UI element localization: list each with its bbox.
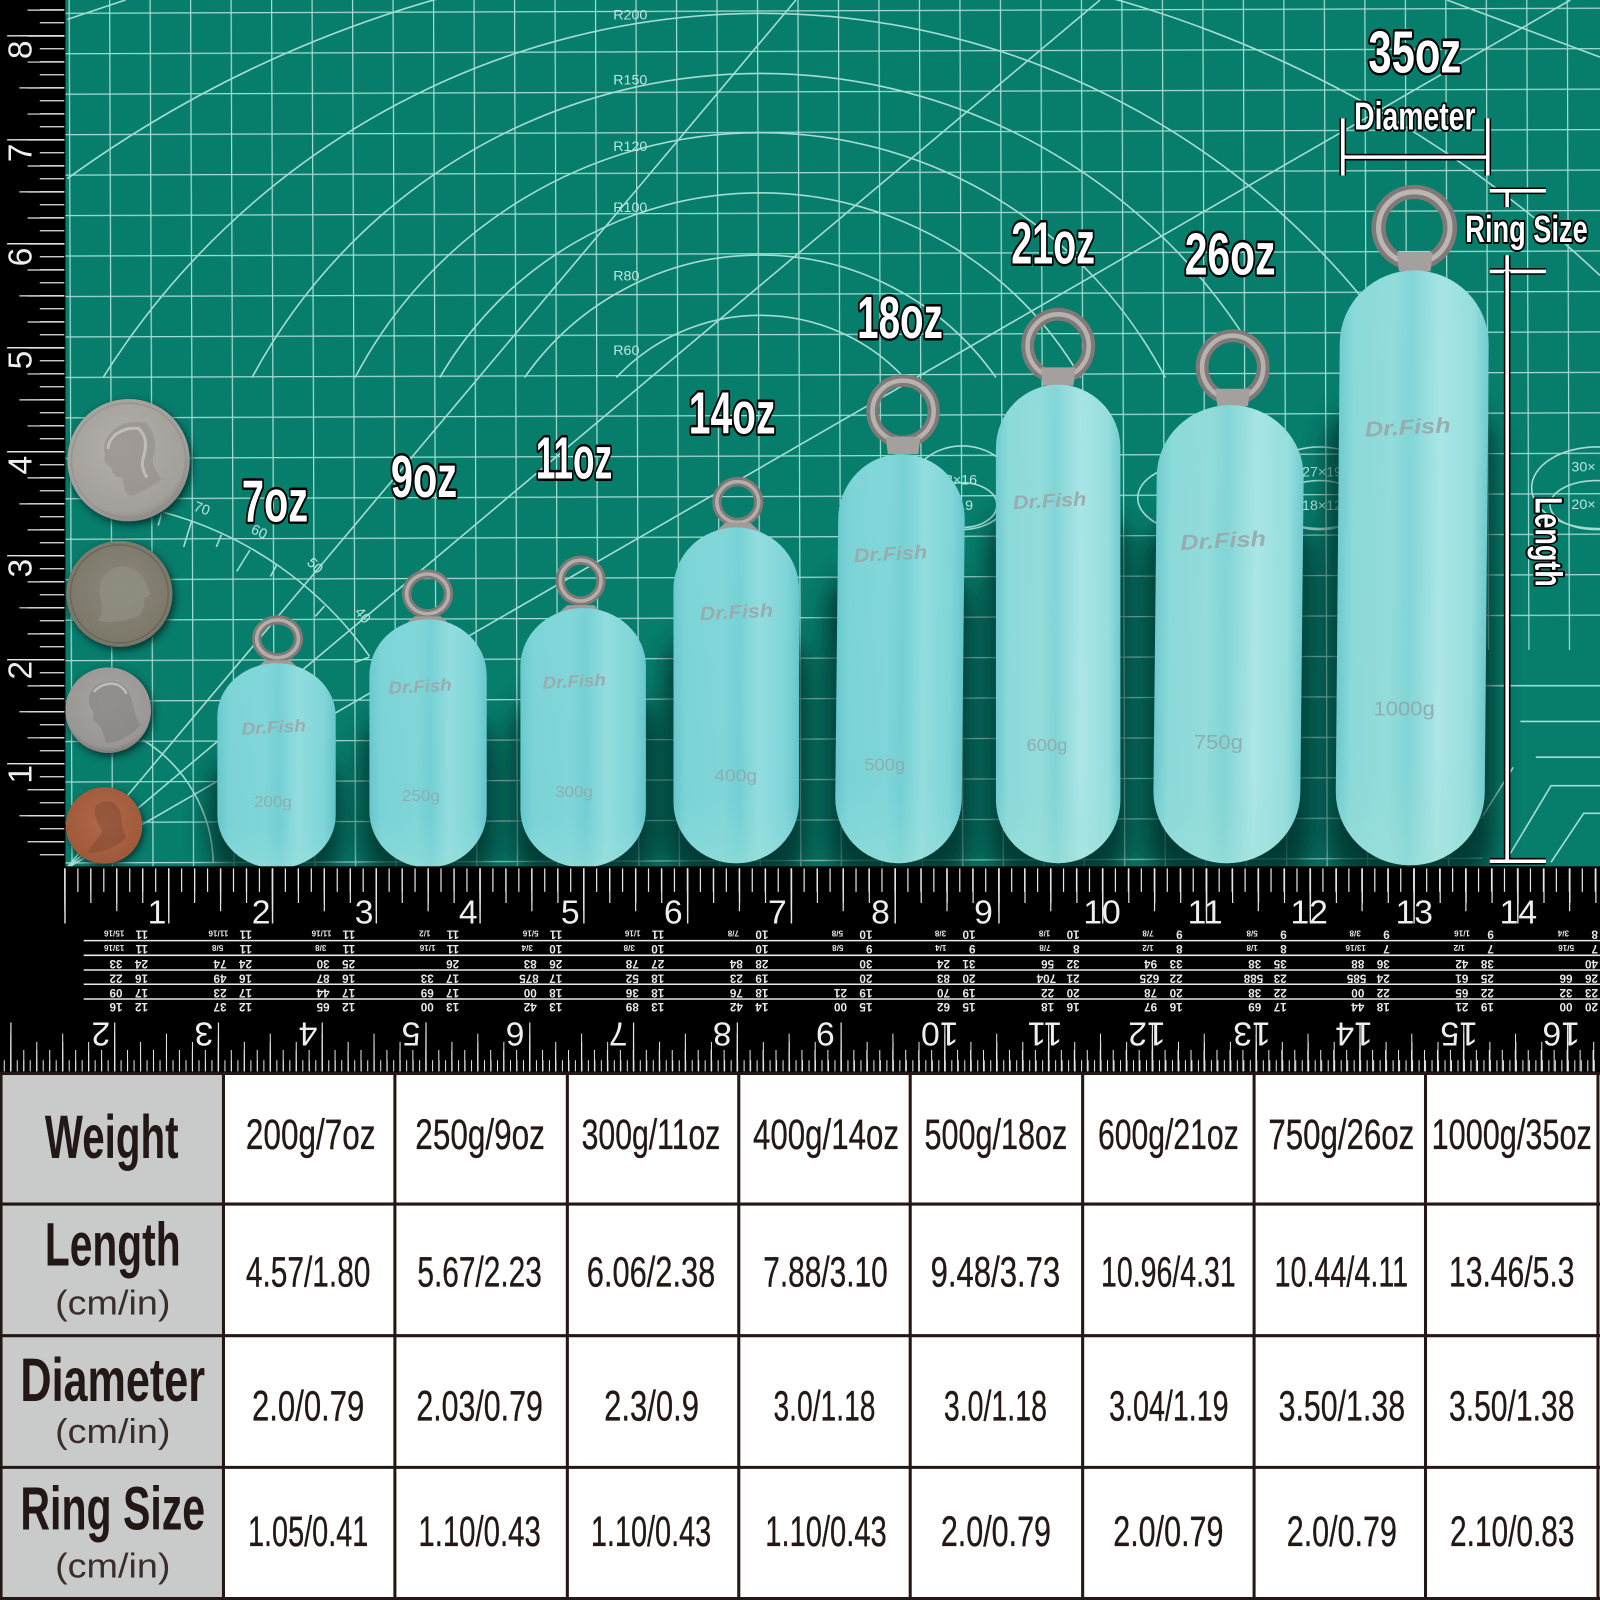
panel: cutting mat background: R100 bbox=[613, 200, 647, 216]
panel: cutting mat background bbox=[65, 0, 1600, 868]
conversion strip: 1113/16 bbox=[103, 942, 148, 955]
sinker: 18oz: Dr.Fish bbox=[853, 541, 928, 567]
left inch ruler: 8 bbox=[3, 40, 40, 59]
row: diameter: 3.04/1.19 bbox=[1109, 1382, 1229, 1430]
sinker: 7oz: Dr.Fish bbox=[241, 715, 306, 739]
row: weight: 400g/14oz bbox=[753, 1111, 899, 1159]
row: weight: Weight bbox=[45, 1103, 179, 1171]
conversion strip: 101/8 bbox=[1038, 928, 1080, 941]
bottom inverted ruler: 9 bbox=[816, 1014, 835, 1051]
conversion strip: 113/8 bbox=[315, 942, 355, 955]
conversion strip: 33 94 bbox=[1144, 957, 1183, 970]
conversion strip: 103/8 bbox=[934, 928, 976, 941]
bottom inverted ruler: 11 bbox=[1027, 1014, 1062, 1051]
conversion strip: 23 32 bbox=[1559, 986, 1598, 999]
row: ring size: 1.10/0.43 bbox=[418, 1508, 541, 1556]
conversion strip bbox=[84, 928, 1600, 1013]
sinker: 9oz: Dr.Fish bbox=[388, 675, 452, 698]
bottom inverted ruler: 16 bbox=[1543, 1014, 1580, 1051]
conversion strip: 16 49 bbox=[213, 971, 252, 984]
conversion strip: 93/8 bbox=[1349, 928, 1390, 941]
conversion strip: 10 bbox=[755, 942, 768, 955]
row: ring size bbox=[20, 1475, 1574, 1586]
coin: nickel bbox=[65, 667, 153, 756]
conversion strip: 18 36 bbox=[625, 986, 664, 999]
row: ring size: 1.05/0.41 bbox=[248, 1508, 368, 1556]
left inch ruler: 6 bbox=[3, 248, 40, 266]
conversion strip: 115/16 bbox=[522, 928, 562, 941]
conversion strip: 22 625 bbox=[1139, 971, 1183, 984]
sinker: 35oz: 1000g bbox=[1373, 698, 1435, 720]
conversion strip: 18 44 bbox=[1351, 1000, 1390, 1013]
row: diameter: 2.3/0.9 bbox=[604, 1382, 699, 1430]
conversion strip: 38 42 bbox=[1455, 957, 1494, 970]
conversion strip: 24 74 bbox=[213, 957, 252, 970]
bottom inverted ruler: 10 bbox=[921, 1014, 959, 1051]
sinker: 26oz: 750g bbox=[1194, 732, 1243, 754]
conversion strip: 18 52 bbox=[625, 971, 664, 984]
top inch ruler: 14 bbox=[1500, 894, 1537, 931]
left inch ruler: 5 bbox=[3, 351, 40, 369]
conversion strip: 35 38 bbox=[1248, 957, 1287, 970]
row: length: 6.06/2.38 bbox=[587, 1249, 715, 1297]
conversion strip: 15 62 bbox=[937, 1000, 976, 1013]
conversion strip: 20 22 bbox=[1041, 986, 1080, 999]
conversion strip: 26 83 bbox=[523, 957, 562, 970]
row: diameter: 2.0/0.79 bbox=[252, 1382, 364, 1430]
conversion strip: 91/4 bbox=[935, 942, 976, 955]
panel: cutting mat background: 27×19 bbox=[1302, 465, 1342, 481]
conversion strip: 107/8 bbox=[727, 928, 768, 941]
conversion strip: 95/8 bbox=[1246, 928, 1287, 941]
panel: cutting mat background: 2×16 bbox=[945, 473, 977, 489]
top inch ruler: 1 bbox=[148, 894, 166, 931]
conversion strip: 25 30 bbox=[316, 957, 355, 970]
sinker: 35oz bbox=[1335, 192, 1489, 866]
conversion strip: 20 bbox=[859, 971, 872, 984]
row: weight: 250g/9oz bbox=[415, 1111, 545, 1159]
conversion strip: 111/16 bbox=[624, 928, 664, 941]
conversion strip: 18 00 bbox=[523, 986, 562, 999]
row: diameter bbox=[20, 1346, 1574, 1451]
row: weight bbox=[45, 1103, 1592, 1171]
coins: size comparison bbox=[65, 399, 192, 866]
label: 9oz: 9oz bbox=[391, 443, 457, 510]
conversion strip: 713/16 bbox=[1345, 942, 1390, 955]
conversion strip: 103/4 bbox=[521, 942, 562, 955]
label: 21oz: 21oz bbox=[1011, 209, 1095, 276]
dimension: length bbox=[1490, 271, 1570, 861]
panel: cutting mat background: 70 bbox=[191, 499, 212, 519]
sinker: 14oz: Dr.Fish bbox=[699, 600, 774, 625]
row: length: 10.44/4.11 bbox=[1274, 1249, 1408, 1297]
row: length: Length bbox=[45, 1210, 181, 1278]
row: weight: 300g/11oz bbox=[582, 1111, 720, 1159]
panel: cutting mat background: 60 bbox=[248, 522, 270, 543]
conversion strip: 17 09 bbox=[109, 986, 148, 999]
top inch ruler bbox=[0, 866, 1600, 1074]
conversion strip: 20 78 bbox=[1144, 986, 1183, 999]
conversion strip: 36 88 bbox=[1351, 957, 1390, 970]
conversion strip: 103/8 bbox=[623, 942, 664, 955]
row: length: (cm/in) bbox=[55, 1284, 170, 1322]
row: length: 9.48/3.73 bbox=[931, 1249, 1060, 1297]
conversion strip: 15 00 bbox=[833, 1000, 872, 1013]
dimension: diameter: Diameter bbox=[1354, 96, 1476, 139]
conversion strip: 20 83 bbox=[937, 971, 976, 984]
conversion strip: 1115/16 bbox=[103, 928, 148, 941]
coin: penny bbox=[66, 787, 144, 866]
row: length: 10.96/4.31 bbox=[1101, 1249, 1236, 1297]
label: 26oz: 26oz bbox=[1185, 220, 1276, 287]
panel: cutting mat background: R150 bbox=[613, 73, 647, 89]
row: weight: 750g/26oz bbox=[1268, 1111, 1414, 1159]
conversion strip: 26 bbox=[446, 957, 459, 970]
conversion strip: 95/8 bbox=[832, 942, 872, 955]
conversion strip: 20 00 bbox=[1559, 1000, 1598, 1013]
weight labels bbox=[242, 18, 1461, 534]
conversion strip: 16 87 bbox=[317, 971, 355, 984]
bottom inverted ruler: 5 bbox=[402, 1014, 420, 1051]
bottom inverted ruler: 7 bbox=[609, 1014, 628, 1051]
left inch ruler bbox=[0, 0, 65, 868]
panel: cutting mat background: 30× bbox=[1571, 459, 1596, 475]
sinker: 7oz bbox=[217, 620, 336, 868]
row: ring size: 1.10/0.43 bbox=[765, 1508, 887, 1556]
row: length bbox=[45, 1210, 1574, 1322]
left inch ruler: 3 bbox=[3, 559, 40, 578]
row: diameter: 2.03/0.79 bbox=[416, 1382, 543, 1430]
coin: dollar bbox=[66, 541, 174, 650]
conversion strip: 24 33 bbox=[109, 957, 148, 970]
sinker: 21oz: 600g bbox=[1027, 735, 1067, 755]
conversion strip: 75/16 bbox=[1558, 942, 1598, 955]
conversion strip: 16 22 bbox=[109, 971, 148, 984]
conversion strip: 27 78 bbox=[625, 957, 664, 970]
bottom inverted ruler: 14 bbox=[1335, 1014, 1373, 1051]
conversion strip: 12 16 bbox=[109, 1000, 148, 1013]
top inch ruler: 11 bbox=[1188, 894, 1223, 931]
conversion strip: 32 56 bbox=[1041, 957, 1080, 970]
row: ring size: 2.0/0.79 bbox=[941, 1508, 1051, 1556]
row: length: 5.67/2.23 bbox=[417, 1249, 542, 1297]
row: weight: 200g/7oz bbox=[246, 1111, 376, 1159]
left inch ruler: 2 bbox=[3, 661, 40, 680]
row: weight: 600g/21oz bbox=[1098, 1111, 1239, 1159]
coin: half dollar bbox=[67, 399, 192, 524]
dimension: diameter bbox=[1343, 96, 1488, 176]
top inch ruler: 2 bbox=[252, 894, 270, 931]
measurement callouts bbox=[1343, 96, 1588, 861]
conversion strip: 13 89 bbox=[625, 1000, 664, 1013]
conversion strip: 1111/16 bbox=[311, 928, 355, 941]
top inch ruler: 3 bbox=[355, 894, 373, 931]
bottom inverted ruler: 3 bbox=[195, 1014, 213, 1051]
conversion strip: 115/8 bbox=[212, 942, 252, 955]
sinker: 9oz: 250g bbox=[402, 788, 440, 805]
top inch ruler: 13 bbox=[1396, 894, 1433, 931]
conversion strip: 111/2 bbox=[419, 928, 459, 941]
conversion strip: 16 97 bbox=[1144, 1000, 1183, 1013]
bottom inverted ruler: 2 bbox=[91, 1014, 110, 1051]
sinker: 35oz: Dr.Fish bbox=[1364, 413, 1451, 442]
row: diameter: 3.50/1.38 bbox=[1279, 1382, 1405, 1430]
bottom inverted ruler: 8 bbox=[713, 1014, 732, 1051]
sinker: 9oz bbox=[369, 574, 487, 867]
label: 35oz: 35oz bbox=[1368, 18, 1461, 85]
sinker: 14oz bbox=[673, 482, 799, 863]
panel: cutting mat background: R200 bbox=[613, 7, 647, 23]
sinker: 26oz bbox=[1153, 336, 1304, 864]
conversion strip: 22 00 bbox=[1351, 986, 1390, 999]
top inch ruler: 12 bbox=[1290, 894, 1328, 931]
row: diameter: (cm/in) bbox=[55, 1413, 170, 1451]
top inch ruler: 8 bbox=[871, 894, 890, 931]
panel: cutting mat background: 50 bbox=[303, 555, 326, 577]
conversion strip: 19 23 bbox=[729, 971, 768, 984]
panel: cutting mat background: R60 bbox=[613, 343, 640, 359]
left inch ruler: 4 bbox=[3, 456, 40, 474]
left inch ruler: 1 bbox=[3, 765, 40, 784]
top inch ruler: 4 bbox=[459, 894, 478, 931]
panel: cutting mat background: 19 bbox=[957, 498, 973, 514]
conversion strip: 17 875 bbox=[519, 971, 562, 984]
bottom inverted ruler: 13 bbox=[1233, 1014, 1271, 1051]
label: 14oz: 14oz bbox=[689, 380, 776, 447]
conversion strip: 22 65 bbox=[1455, 986, 1494, 999]
conversion strip: 17 44 bbox=[316, 986, 355, 999]
row: ring size: 1.10/0.43 bbox=[591, 1508, 711, 1556]
sinker: 11oz: Dr.Fish bbox=[542, 669, 606, 693]
conversion strip: 91/16 bbox=[1454, 928, 1494, 941]
row: ring size: 2.0/0.79 bbox=[1287, 1508, 1397, 1556]
top inch ruler: 10 bbox=[1083, 894, 1121, 931]
sinker: 14oz: 400g bbox=[714, 766, 757, 786]
row: diameter: Diameter bbox=[20, 1346, 205, 1414]
bottom inverted ruler bbox=[4, 1014, 1600, 1066]
bottom inverted ruler: 6 bbox=[506, 1014, 524, 1051]
spec table bbox=[0, 1073, 1600, 1600]
label: 7oz: 7oz bbox=[242, 467, 308, 534]
sinker: 21oz: Dr.Fish bbox=[1012, 488, 1087, 514]
top inch ruler: 5 bbox=[561, 894, 580, 931]
row: diameter: 3.0/1.18 bbox=[944, 1382, 1047, 1430]
conversion strip: 111/16 bbox=[419, 942, 459, 955]
panel: cutting mat background: 18×12 bbox=[1302, 498, 1342, 514]
conversion strip: 14 42 bbox=[729, 1000, 768, 1013]
row: ring size: 2.0/0.79 bbox=[1113, 1508, 1223, 1556]
panel: cutting mat background: R80 bbox=[613, 269, 640, 285]
label: 11oz: 11oz bbox=[536, 425, 612, 492]
left inch ruler: 7 bbox=[3, 144, 40, 162]
conversion strip: 19 21 bbox=[1455, 1000, 1494, 1013]
dimension: ring size bbox=[1465, 191, 1588, 271]
row: weight: 500g/18oz bbox=[924, 1111, 1067, 1159]
panel: cutting mat background: R120 bbox=[613, 139, 647, 155]
conversion strip: 17 69 bbox=[420, 986, 459, 999]
conversion strip: 13 00 bbox=[420, 1000, 459, 1013]
conversion strip: 25 61 bbox=[1455, 971, 1494, 984]
conversion strip: 22 38 bbox=[1248, 986, 1287, 999]
row: length: 7.88/3.10 bbox=[763, 1249, 888, 1297]
row: ring size: Ring Size bbox=[20, 1475, 205, 1543]
conversion strip: 31 24 bbox=[937, 957, 976, 970]
row: diameter: 3.0/1.18 bbox=[773, 1382, 876, 1430]
conversion strip: 12 37 bbox=[214, 1000, 252, 1013]
panel: cutting mat background: 20× bbox=[1571, 497, 1596, 513]
bottom inverted ruler: 15 bbox=[1440, 1014, 1478, 1051]
top inch ruler: 6 bbox=[664, 894, 683, 931]
conversion strip: 17 69 bbox=[1248, 1000, 1287, 1013]
conversion strip: 1111/16 bbox=[208, 928, 252, 941]
conversion strip: 19 70 bbox=[937, 986, 976, 999]
conversion strip: 97/8 bbox=[1142, 928, 1183, 941]
conversion strip: 105/8 bbox=[831, 928, 872, 941]
conversion strip: 28 84 bbox=[729, 957, 768, 970]
bottom inverted ruler: 12 bbox=[1128, 1014, 1166, 1051]
label: 18oz: 18oz bbox=[857, 284, 943, 351]
sinker: 18oz: 500g bbox=[864, 754, 905, 774]
conversion strip: 17 23 bbox=[213, 986, 252, 999]
sinker: 18oz bbox=[835, 381, 965, 864]
conversion strip: 12 65 bbox=[316, 1000, 355, 1013]
conversion strip: 23 588 bbox=[1243, 971, 1287, 984]
sinker: 11oz: 300g bbox=[555, 784, 593, 801]
shadows under capsules bbox=[209, 408, 1495, 883]
conversion strip: 13 42 bbox=[523, 1000, 562, 1013]
top inch ruler: 7 bbox=[768, 894, 787, 931]
conversion strip: 16 18 bbox=[1041, 1000, 1080, 1013]
dimension: length: Length bbox=[1528, 497, 1570, 587]
conversion strip: 17 33 bbox=[420, 971, 459, 984]
conversion strip: 30 bbox=[859, 957, 872, 970]
conversion strip: 18 76 bbox=[729, 986, 768, 999]
sinker: 7oz: 200g bbox=[254, 794, 292, 811]
row: length: 4.57/1.80 bbox=[246, 1249, 370, 1297]
sinker: 26oz: Dr.Fish bbox=[1180, 527, 1266, 555]
row: ring size: (cm/in) bbox=[55, 1548, 170, 1586]
conversion strip: 26 66 bbox=[1559, 971, 1598, 984]
bottom inverted ruler: 4 bbox=[299, 1014, 317, 1051]
conversion strip: 81/8 bbox=[1246, 942, 1287, 955]
conversion strip: 87/8 bbox=[1039, 942, 1080, 955]
sinker: 21oz bbox=[996, 314, 1120, 863]
conversion strip: 71/2 bbox=[1453, 942, 1494, 955]
sinker: 11oz bbox=[520, 560, 646, 867]
conversion strip: 24 585 bbox=[1346, 971, 1390, 984]
conversion strip: 19 21 bbox=[833, 986, 872, 999]
conversion strip: 83/4 bbox=[1557, 928, 1598, 941]
conversion strip: 40 bbox=[1584, 957, 1598, 970]
conversion strip: 21 704 bbox=[1036, 971, 1080, 984]
panel: cutting mat background: 40 bbox=[351, 605, 374, 627]
top inch ruler: 9 bbox=[974, 894, 993, 931]
conversion strip: 81/2 bbox=[1142, 942, 1183, 955]
